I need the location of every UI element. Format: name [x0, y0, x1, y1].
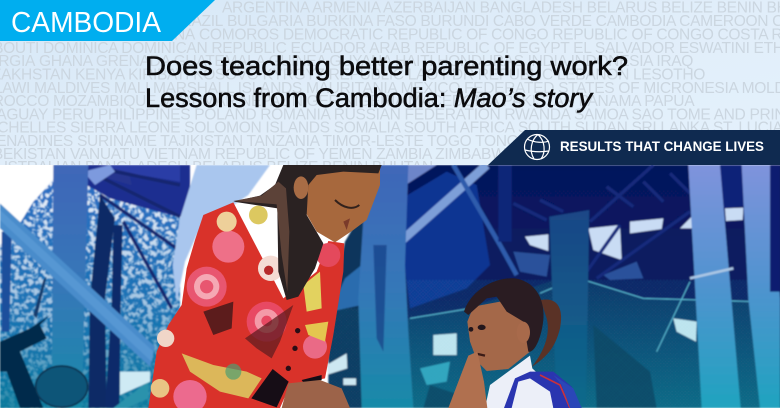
- title: [145, 51, 628, 113]
- girl's hair: [464, 278, 544, 352]
- header panel: country-name background: SIERRA LEONE SOLOMON ISLANDS SOMALIA SOUTH AFRICA SOUTH SUDAN SRI LANKA ST. LUCIA: [70, 120, 780, 136]
- header panel: country-name background: MOZAMBIQUE MYANMAR NEPAL NIGER NIGERIA MACEDONIA PAKISTAN PANAMA PAPUA: [53, 93, 695, 110]
- banner: results that change lives: RESULTS THAT CHANGE LIVES: [560, 138, 764, 154]
- girl's ear: [523, 322, 530, 342]
- figure: girl in school uniform: [448, 278, 582, 408]
- woman's cuff and hands: [251, 369, 350, 408]
- header panel: country-name background: CHINA: [148, 26, 196, 44]
- scene: post beside the woman and fence: [327, 165, 413, 408]
- curtain sheet: [173, 165, 270, 302]
- girl's ponytail: [532, 300, 561, 367]
- header panel: country-name background: BANGLADESH BELARUS BELIZE BENIN BHUTAN: [85, 159, 433, 176]
- country tab: CAMBODIA: [11, 7, 162, 39]
- woman's dress: [148, 202, 344, 408]
- header panel: country-name background: SURINAME TAJIKISTAN TANZANIA TIMOR-LESTE TOGO TONGA TUNISIA: [77, 133, 591, 150]
- header panel: country-name background: VANUATU VIETNAM REPUBLIC OF YEMEN ZAMBIA ZIMBABWE AFGHANISTAN: [70, 146, 625, 163]
- header panel: country-name background: [0, 0, 780, 176]
- girl's hands: [448, 352, 487, 408]
- title: Does teaching better parenting work?: [145, 51, 628, 81]
- country tab: [0, 0, 215, 41]
- girl's shirt: [485, 356, 553, 408]
- figure: woman in floral dress: [148, 165, 382, 408]
- girl's face: [467, 302, 530, 371]
- scene: left foliage and structure: [0, 165, 190, 408]
- banner: results that change lives: [488, 130, 780, 165]
- header panel: country-name background: BRAZIL: [170, 13, 224, 30]
- icon: World Bank globe: [524, 134, 550, 160]
- girl's eyes and smile: [469, 325, 486, 356]
- icon: motorcycle: [0, 277, 88, 408]
- header panel: country-name background: GHANA GRENADA GUATEMALA GUINEA GUYANA HAITI HONDURAS INDIA INDONESIA IRAQ: [39, 53, 693, 70]
- girl's backpack: [504, 372, 582, 408]
- woman's hair and face: [233, 165, 382, 300]
- title: Lessons from Cambodia: Mao’s story: [145, 83, 594, 113]
- scene: right dark interior with posts: [370, 165, 780, 408]
- photo: woman and girl under a stilt house: [0, 165, 780, 408]
- header panel: country-name background: KENYA KIRIBATI KOSOVO KYRGYZ REPUBLIC LAO PDR REPUBLIC LEBANON LESOTHO: [75, 66, 705, 84]
